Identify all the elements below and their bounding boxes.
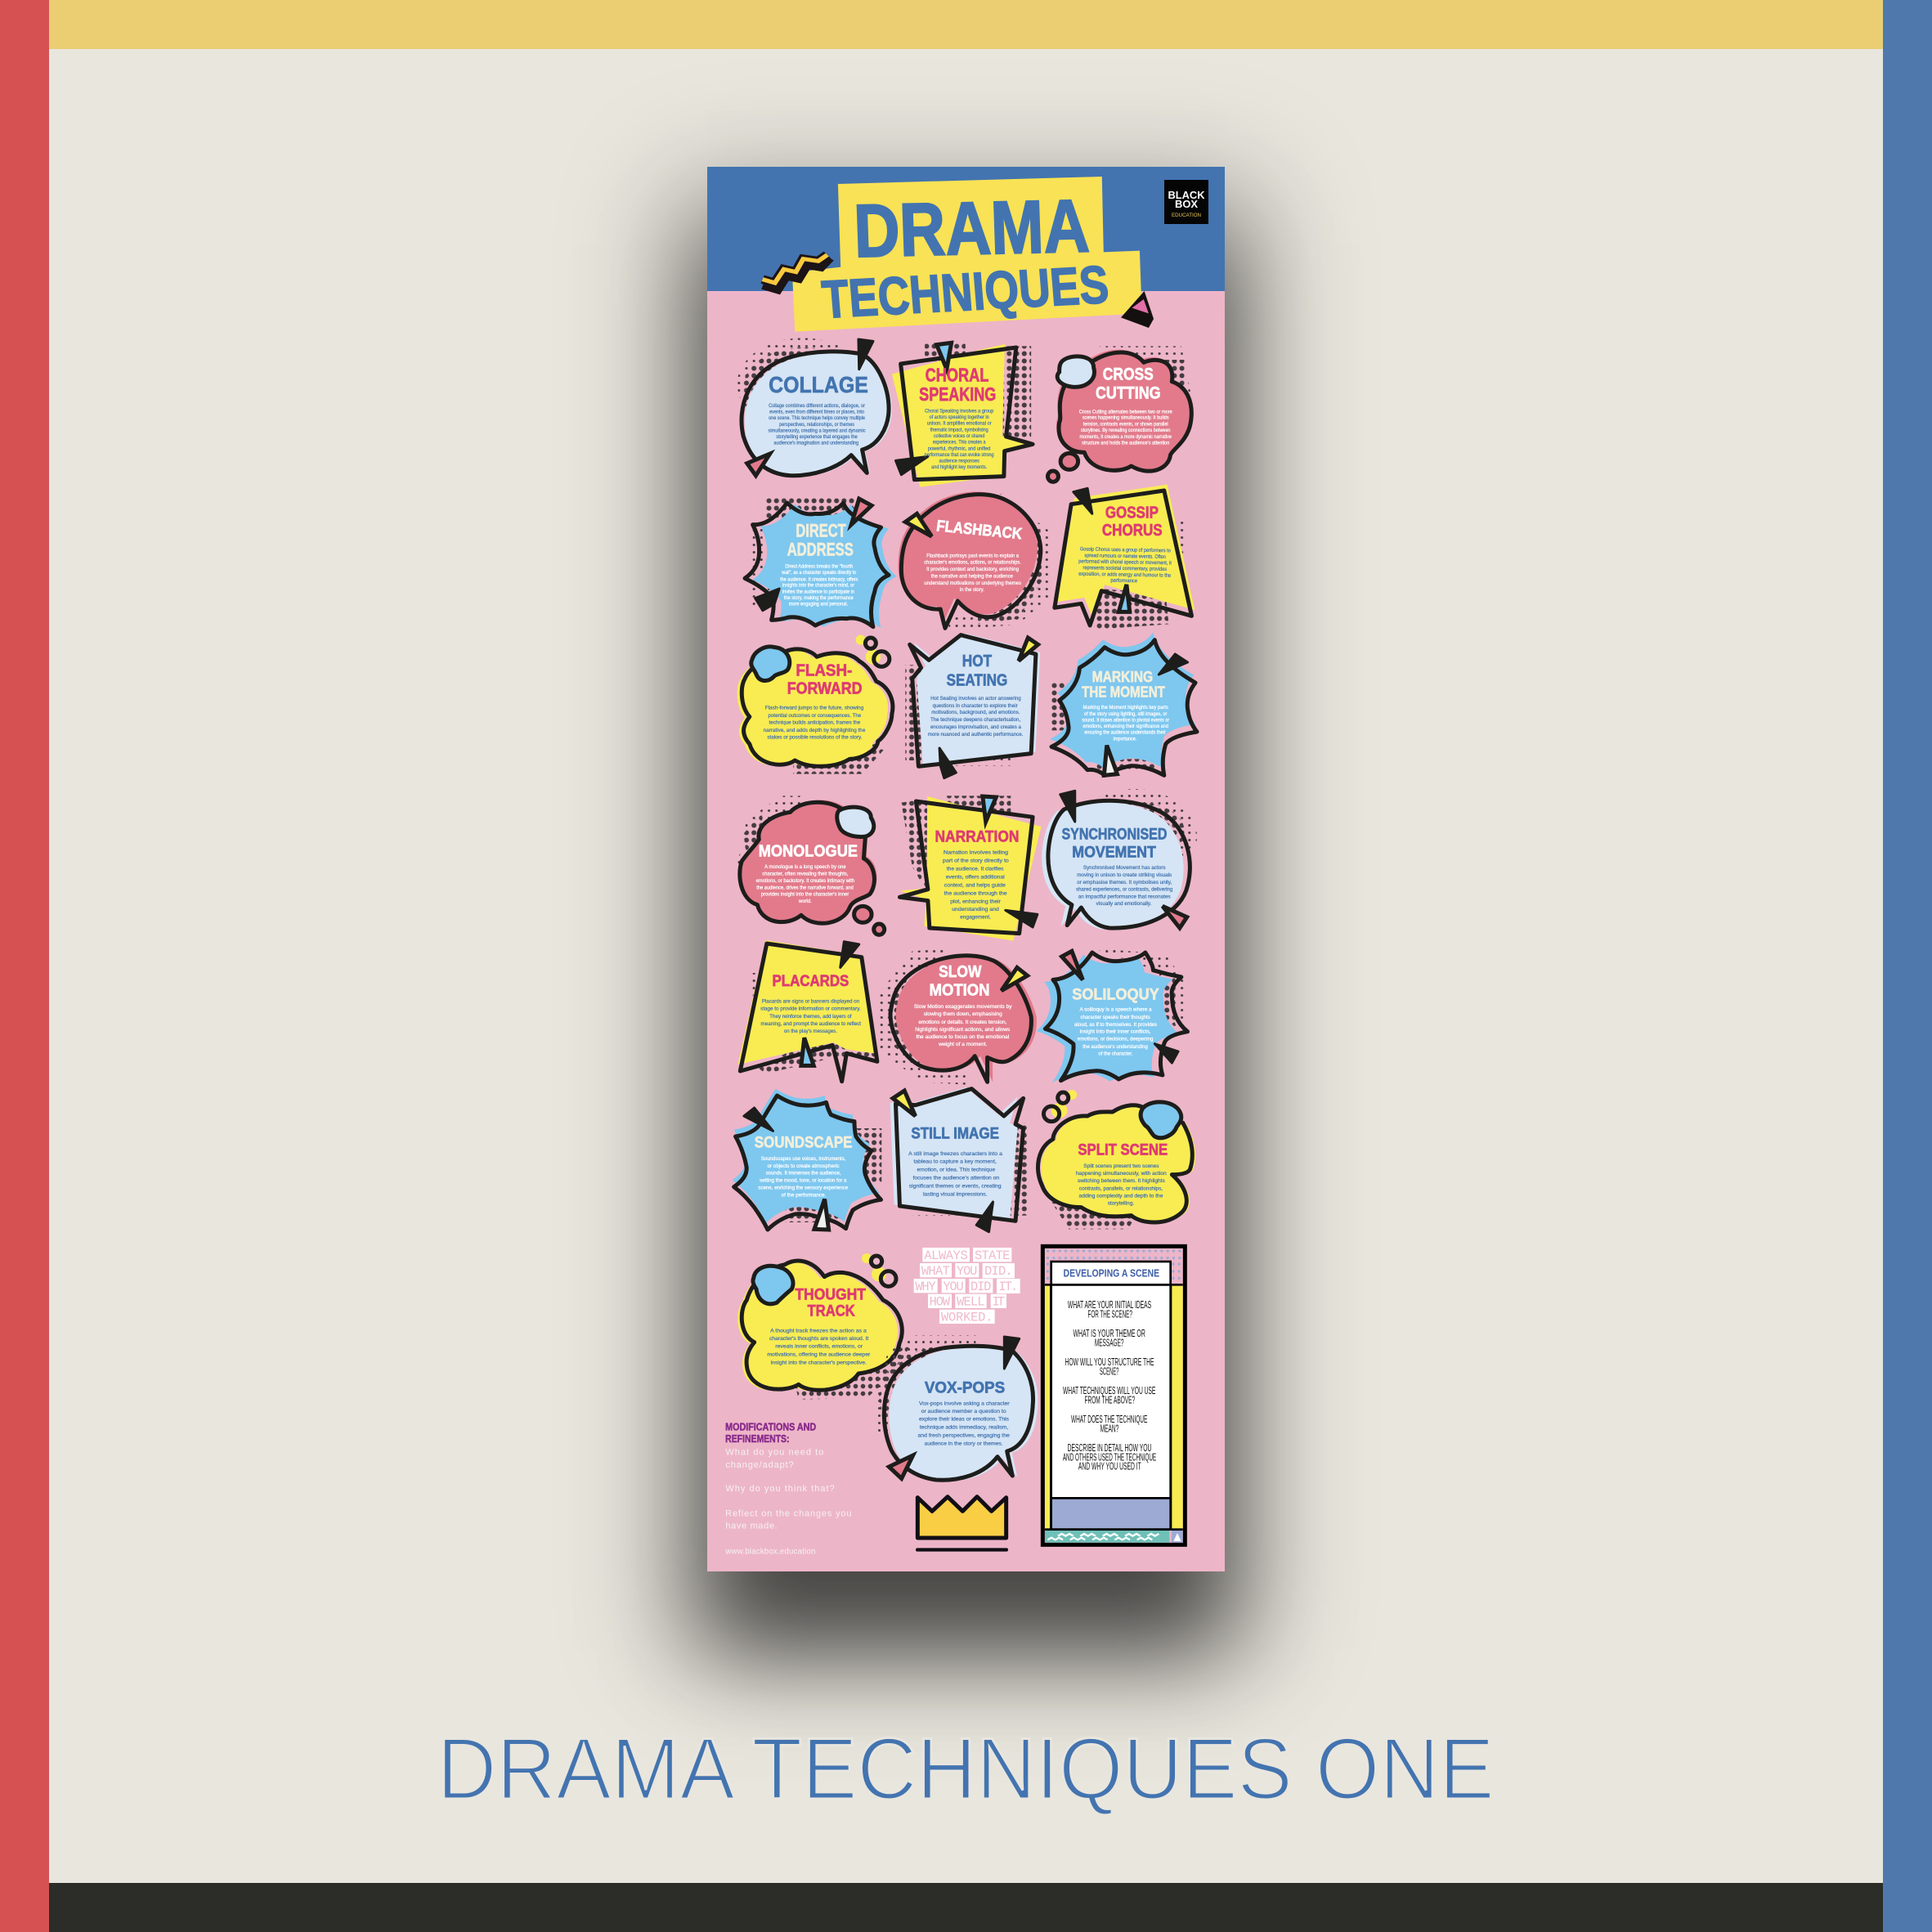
callout: always state: WHAT xyxy=(921,1264,950,1279)
placards text: on the play's messages. xyxy=(784,1029,837,1034)
soliloquy text: emotions, or decisions, deepening xyxy=(1078,1037,1154,1042)
thought track text: A thought track freezes the action as a xyxy=(770,1329,867,1334)
soundscape text: Soundscapes use voices, instruments, xyxy=(761,1156,846,1162)
title: TECHNIQUES: TECHNIQUES xyxy=(820,255,1111,329)
still image text: focuses the audience's attention on xyxy=(913,1176,999,1181)
choral speaking title: CHORAL xyxy=(926,365,988,386)
bubble: collage xyxy=(737,338,892,477)
slow motion text: slowing them down, emphasising xyxy=(924,1011,1002,1017)
text block: modifications and refinements: What do you need to xyxy=(725,1447,823,1457)
marking the moment text: importance. xyxy=(1114,737,1136,742)
soliloquy text xyxy=(1074,1007,1158,1057)
choral speaking text: audience responses xyxy=(939,459,979,464)
hot seating title xyxy=(947,651,1007,689)
flashback text xyxy=(924,554,1021,593)
choral speaking text xyxy=(925,409,994,470)
text block: modifications and refinements: Why do you think that? xyxy=(725,1484,835,1494)
choral speaking text: powerful, rhythmic, and unified xyxy=(928,446,991,451)
flashback text: the narrative and helping the audience xyxy=(931,574,1013,579)
header title block xyxy=(763,177,1154,332)
panel questions: WHAT IS YOUR THEME OR xyxy=(1073,1328,1145,1339)
cross cutting title: CROSS xyxy=(1103,364,1154,383)
still image text xyxy=(908,1151,1002,1198)
flash-forward text: technique builds anticipation, frames the xyxy=(769,720,860,726)
panel questions: FOR THE SCENE? xyxy=(1087,1309,1132,1320)
slow motion title: MOTION xyxy=(930,980,989,999)
panel: developing a scene xyxy=(1042,1246,1185,1544)
hot seating text xyxy=(928,696,1024,737)
slow motion text: highlights significant actions, and allows xyxy=(915,1027,1011,1033)
hot seating text: Hot Seating involves an actor answering xyxy=(930,696,1021,702)
icon: pink triangle xyxy=(1121,291,1154,328)
title yellow backing xyxy=(792,177,1142,332)
panel questions: FROM THE ABOVE? xyxy=(1084,1395,1135,1406)
cross cutting text: scenes happening simultaneously. It builds xyxy=(1083,415,1169,421)
slow motion text: weight of a moment. xyxy=(938,1042,988,1047)
direct address text: insights into the character's mind, or xyxy=(782,583,855,589)
callout: always state: IT. xyxy=(998,1280,1018,1294)
soliloquy text: A soliloquy is a speech where a xyxy=(1079,1007,1152,1013)
cross cutting text xyxy=(1079,410,1172,446)
panel title: DEVELOPING A SCENE xyxy=(1063,1268,1159,1280)
narration title: NARRATION xyxy=(935,828,1019,845)
collage text: events, even from different times or places, into xyxy=(769,410,864,415)
synchronised movement title xyxy=(1061,826,1167,861)
cross cutting title xyxy=(1096,364,1161,402)
callout: always state: STATE xyxy=(975,1248,1010,1263)
narration text: understanding and xyxy=(952,907,999,912)
soundscape text xyxy=(758,1156,848,1198)
split scene text xyxy=(1076,1163,1167,1207)
choral speaking text: experiences. This creates a xyxy=(933,440,986,446)
narration text: plot, enhancing their xyxy=(950,899,1002,904)
synchronised movement title: MOVEMENT xyxy=(1072,844,1156,861)
panel questions: WHAT TECHNIQUES WILL YOU USE xyxy=(1063,1385,1155,1396)
text block: modifications and refinements xyxy=(724,1421,851,1557)
logo: black box education: EDUCATION xyxy=(1172,213,1201,218)
bubble: cross cutting xyxy=(1047,346,1194,482)
thought track text: character's thoughts are spoken aloud. It xyxy=(769,1336,869,1342)
bubble: gossip chorus xyxy=(1055,485,1195,630)
marking the moment text xyxy=(1082,705,1170,742)
frame: left red band xyxy=(0,0,49,1932)
choral speaking text: thematic impact, symbolising xyxy=(930,428,988,433)
bubble: marking the moment xyxy=(1050,632,1197,775)
monologue text: A monologue is a long speech by one xyxy=(764,864,846,870)
slow motion title: SLOW xyxy=(939,962,982,981)
soliloquy text: aloud, as if to themselves. It provides xyxy=(1074,1022,1158,1028)
flash-forward title: FLASH- xyxy=(796,661,852,679)
still image text: lasting visual impressions. xyxy=(923,1192,988,1198)
callout: always state: YOU xyxy=(957,1264,977,1279)
text block: modifications and refinements: MODIFICATIONS AND xyxy=(725,1421,816,1432)
marking the moment title: MARKING xyxy=(1092,669,1153,686)
synchronised movement title: SYNCHRONISED xyxy=(1061,826,1167,843)
soliloquy text: insight into their inner conflicts, xyxy=(1080,1029,1151,1035)
narration text: context, and helps guide xyxy=(944,883,1006,889)
callout: always state: WELL xyxy=(957,1295,984,1310)
narration text: Narration involves telling xyxy=(944,850,1008,856)
monologue text xyxy=(756,864,854,904)
icon: zigzag xyxy=(763,255,829,289)
cross cutting text: tension, contrasts events, or shows parallel xyxy=(1083,422,1168,427)
bubble: soliloquy xyxy=(1037,948,1187,1083)
still image text: tableau to capture a key moment, xyxy=(913,1159,997,1165)
synchronised movement text: visually and emotionally. xyxy=(1096,901,1151,907)
synchronised movement text: Synchronised Movement has actors xyxy=(1083,865,1166,871)
marking the moment text: ensuring the audience understands their xyxy=(1084,730,1166,736)
choral speaking text: and highlight key moments. xyxy=(931,464,987,470)
bubble: split scene xyxy=(1038,1090,1195,1229)
poster blue header band xyxy=(707,167,1225,291)
panel questions: MESSAGE? xyxy=(1095,1338,1123,1349)
choral speaking text: performance that can evoke strong xyxy=(925,452,994,458)
gossip chorus text: spread rumours or narrate events. Often xyxy=(1084,553,1166,560)
split scene title: SPLIT SCENE xyxy=(1078,1141,1168,1159)
text block: modifications and refinements: Reflect on the changes you xyxy=(725,1508,851,1518)
bubble: placards xyxy=(738,940,878,1082)
direct address text: the audience. It creates intimacy, offers xyxy=(780,577,858,582)
bubble: monologue xyxy=(737,796,885,935)
soundscape text: or objects to create atmospheric xyxy=(768,1163,840,1169)
vox-pops text: technique adds immediacy, realism, xyxy=(920,1425,1008,1431)
gossip chorus text: Gossip Chorus uses a group of performers to xyxy=(1080,547,1171,554)
thought track text: reveals inner conflicts, emotions, or xyxy=(775,1344,863,1350)
callout: always state: DID xyxy=(970,1280,991,1294)
gossip chorus title: GOSSIP xyxy=(1105,504,1159,522)
flash-forward text: narrative, and adds depth by highlighting the xyxy=(764,728,866,733)
collage text: simultaneously, creating a layered and dynamic xyxy=(769,428,866,433)
panel questions: WHAT DOES THE TECHNIQUE xyxy=(1071,1414,1147,1425)
slow motion text: Slow Motion exaggerates movements by xyxy=(914,1004,1012,1010)
synchronised movement text: moving in unison to create striking visuals xyxy=(1077,872,1172,878)
hot seating text: more nuanced and authentic performance. xyxy=(928,732,1024,737)
collage text: Collage combines different actions, dialogue, or xyxy=(769,403,866,409)
direct address text: the story, making the performance xyxy=(784,595,854,601)
flash-forward text: stakes or possible resolutions of the story. xyxy=(767,735,862,741)
direct address title xyxy=(787,522,854,560)
text block: modifications and refinements: www.blackbox.education xyxy=(724,1548,815,1557)
flashback text: It provides context and backstory, enriching xyxy=(926,567,1019,572)
narration text: the audience through the xyxy=(944,891,1007,897)
choral speaking text: Choral Speaking involves a group xyxy=(925,409,993,414)
panel corner triangle xyxy=(1172,1531,1183,1543)
synchronised movement text xyxy=(1076,865,1173,907)
bubble: flash-forward xyxy=(737,635,893,774)
callout: always state: ALWAYS xyxy=(924,1248,968,1263)
soundscape text: of the performance. xyxy=(782,1193,826,1198)
monologue text: provides insight into the character's inner xyxy=(761,892,849,897)
cross cutting text: moments, it creates a more dynamic narrative xyxy=(1079,434,1172,440)
bubble: still image xyxy=(890,1087,1029,1232)
monologue text: world. xyxy=(798,899,812,904)
split scene text: storytelling. xyxy=(1108,1201,1134,1207)
soundscape text: scene, enriching the sensory experience xyxy=(758,1186,848,1190)
poster background with drop shadow xyxy=(707,167,1225,1571)
vox-pops text: Vox-pops involve asking a character xyxy=(919,1401,1010,1407)
choral speaking title: SPEAKING xyxy=(919,384,996,406)
gossip chorus text: represents societal commentary, provides xyxy=(1083,565,1168,572)
bubble: thought track xyxy=(737,1253,910,1400)
monologue text: character, often revealing their thoughts, xyxy=(762,872,849,876)
callout: always state: HOW xyxy=(930,1295,951,1310)
marking the moment title: THE MOMENT xyxy=(1082,684,1165,701)
collage text: storytelling experience that engages the xyxy=(776,434,858,440)
narration text xyxy=(943,850,1009,921)
cross cutting text: Cross Cutting alternates between two or more xyxy=(1079,410,1172,415)
narration text: part of the story directly to xyxy=(943,858,1009,864)
panel questions: AND WHY YOU USED IT xyxy=(1078,1461,1141,1473)
flashback text: understand motivations or underlying themes xyxy=(924,580,1021,586)
direct address text: more engaging and personal. xyxy=(789,602,848,607)
soliloquy text: of the character. xyxy=(1098,1051,1133,1057)
synchronised movement text: shared experiences, or contrasts, delivering xyxy=(1076,887,1173,893)
logo: black box education: BOX xyxy=(1175,198,1198,210)
still image text: A still image freezes characters into a xyxy=(908,1151,1002,1157)
placards text xyxy=(760,999,861,1034)
marking the moment title xyxy=(1082,669,1165,701)
collage text: one scene. This technique helps convey multiple xyxy=(769,415,865,421)
thought track text: motivations, offering the audience deeper xyxy=(767,1352,870,1358)
still image text: emotion, or idea. This technique xyxy=(917,1168,995,1173)
vox-pops text: explore their ideas or emotions. This xyxy=(919,1417,1009,1423)
split scene text: adding complexity and depth to the xyxy=(1079,1194,1163,1199)
hot seating text: motivations, background, and emotions. xyxy=(931,710,1020,715)
monologue title: MONOLOGUE xyxy=(759,841,858,860)
vox-pops text: audience in the story or themes. xyxy=(925,1441,1003,1447)
monologue text: emotions, or backstory. It creates intimacy with xyxy=(756,878,854,884)
hot seating title: HOT xyxy=(962,651,992,670)
direct address text: Direct Address breaks the "fourth xyxy=(785,564,853,569)
choral speaking title xyxy=(919,365,996,406)
thought track title: TRACK xyxy=(807,1302,855,1320)
hot seating title: SEATING xyxy=(947,670,1007,689)
flashback text: character's emotions, actions, or relationships. xyxy=(924,560,1021,566)
caption: drama techniques one: DRAMA TECHNIQUES ONE xyxy=(437,1719,1495,1818)
gossip chorus text: exposition, or adds energy and humour to the xyxy=(1078,572,1171,579)
flash-forward text: Flash-forward jumps to the future, showing xyxy=(765,706,863,711)
vox-pops text: or audience member a question to xyxy=(921,1409,1006,1414)
text block: modifications and refinements: change/adapt? xyxy=(725,1460,794,1470)
placards text: stage to provide information or commentary. xyxy=(760,1006,861,1012)
slow motion text xyxy=(914,1004,1012,1047)
panel questions: HOW WILL YOU STRUCTURE THE xyxy=(1065,1356,1154,1368)
icon: crown xyxy=(916,1497,1008,1552)
cross cutting title: CUTTING xyxy=(1096,383,1161,402)
vox-pops text xyxy=(917,1401,1010,1447)
bubble: hot seating xyxy=(905,634,1040,778)
choral speaking text: unison. It amplifies emotional or xyxy=(927,421,992,427)
text block: modifications and refinements: have made. xyxy=(725,1521,778,1531)
split scene text: happening simultaneously, with action xyxy=(1076,1171,1167,1177)
logo: black box education xyxy=(1164,180,1208,224)
hot seating text: questions in character to explore their xyxy=(933,703,1018,709)
vox-pops title: VOX-POPS xyxy=(925,1379,1005,1396)
still image text: significant themes or events, creating xyxy=(909,1184,1002,1190)
direct address text xyxy=(780,564,858,607)
callout: always state: WORKED. xyxy=(941,1311,993,1325)
hot seating text: encourages improvisation, and creates a xyxy=(930,724,1021,730)
split scene text: Split scenes present two scenes xyxy=(1083,1163,1159,1169)
bubble: slow motion xyxy=(878,948,1037,1085)
flash-forward text xyxy=(764,706,866,741)
callout: always state: WHY xyxy=(915,1280,936,1294)
bubble: vox-pops xyxy=(877,1335,1038,1481)
gossip chorus text xyxy=(1078,547,1172,585)
flashback title: FLASHBACK xyxy=(935,518,1023,543)
gossip chorus title: CHORUS xyxy=(1102,521,1163,540)
split scene text: contrasts, parallels, or relationships, xyxy=(1079,1186,1163,1192)
narration text: events, offers additional xyxy=(946,875,1005,881)
soundscape text: sounds. It immerses the audience, xyxy=(766,1171,841,1177)
placards title: PLACARDS xyxy=(773,972,849,990)
direct address title: ADDRESS xyxy=(787,540,854,560)
direct address title: DIRECT xyxy=(796,522,846,541)
panel questions: SCENE? xyxy=(1100,1366,1118,1378)
flashback text: in the story. xyxy=(960,587,984,593)
thought track title: THOUGHT xyxy=(795,1286,866,1303)
bubble: synchronised movement xyxy=(1042,789,1197,930)
narration text: engagement. xyxy=(960,915,991,921)
synchronised movement text: an impactful performance that resonates xyxy=(1078,894,1171,899)
panel questions: WHAT ARE YOUR INITIAL IDEAS xyxy=(1068,1299,1151,1311)
still image title: STILL IMAGE xyxy=(911,1125,999,1142)
soliloquy text: character speaks their thoughts xyxy=(1080,1015,1150,1020)
split scene text: switching between them. It highlights xyxy=(1078,1178,1165,1184)
marking the moment text: Marking the Moment highlights key parts xyxy=(1083,705,1168,710)
marking the moment text: emotions, enhancing their significance and xyxy=(1083,724,1168,729)
frame: top yellow band xyxy=(49,0,1883,49)
soliloquy title: SOLILOQUY xyxy=(1072,986,1159,1003)
gossip chorus text: performed with choral speech or movement, it xyxy=(1078,559,1172,566)
slow motion title xyxy=(930,962,989,999)
slow motion text: the audience to focus on the emotional xyxy=(917,1034,1010,1040)
logo: black box education: BLACK xyxy=(1168,189,1205,201)
callout: always state xyxy=(914,1248,1020,1325)
gossip chorus title xyxy=(1102,504,1163,540)
bubble: flashback xyxy=(899,491,1050,631)
soundscape text: setting the mood, tone, or location for a xyxy=(760,1178,847,1183)
flash-forward title xyxy=(787,661,863,697)
placards text: meaning, and prompt the audience to reflect xyxy=(761,1021,861,1027)
choral speaking text: of actors speaking together in xyxy=(930,415,989,420)
slow motion text: emotions or details. It creates tension, xyxy=(918,1020,1006,1025)
flash-forward title: FORWARD xyxy=(787,679,863,697)
flash-forward text: potential outcomes or consequences. The xyxy=(769,713,861,719)
flashback text: Flashback portrays past events to explain a xyxy=(926,554,1019,558)
vox-pops text: and fresh perspectives, engaging the xyxy=(917,1433,1010,1439)
cross cutting text: structure and holds the audience's attention xyxy=(1082,441,1169,446)
direct address text: wall", as a character speaks directly to xyxy=(781,570,856,576)
collage text: perspectives, relationships, or themes xyxy=(779,422,854,428)
synchronised movement text: or emphasise themes. It symbolises unity, xyxy=(1077,880,1172,885)
thought track text: insight into the character's perspective. xyxy=(771,1360,867,1366)
text block: modifications and refinements: REFINEMENTS: xyxy=(725,1433,789,1445)
thought track text xyxy=(767,1329,870,1366)
thought track title xyxy=(795,1286,866,1320)
monologue text: the audience, drives the narrative forward, and xyxy=(756,885,854,890)
choral speaking text: collective voices or shared xyxy=(934,433,985,439)
narration text: the audience. It clarifies xyxy=(947,867,1004,872)
collage text xyxy=(769,403,866,446)
bubble: direct address xyxy=(745,496,897,628)
callout: always state: IT xyxy=(993,1295,1005,1310)
soliloquy text: the audience's understanding xyxy=(1083,1044,1148,1050)
callout: always state: DID. xyxy=(984,1264,1013,1279)
marking the moment text: of the story using lighting, still images, or xyxy=(1084,711,1168,717)
placards text: Placards are signs or banners displayed on xyxy=(762,999,859,1004)
bubble: choral speaking xyxy=(892,342,1033,487)
bubble: narration xyxy=(899,796,1041,941)
panel questions: DESCRIBE IN DETAIL HOW YOU xyxy=(1068,1442,1151,1454)
collage title: COLLAGE xyxy=(769,373,868,398)
panel questions xyxy=(1063,1299,1156,1473)
title: DRAMA: DRAMA xyxy=(853,184,1091,273)
cross cutting text: storylines. By revealing connections between xyxy=(1081,428,1171,433)
panel questions: AND OTHERS USED THE TECHNIQUE xyxy=(1063,1452,1156,1464)
collage text: audience's imagination and understanding xyxy=(773,441,858,446)
hot seating text: The technique deepens characterisation, xyxy=(930,717,1020,723)
callout: always state: YOU xyxy=(943,1280,964,1294)
frame: bottom dark band xyxy=(49,1883,1883,1932)
soundscape title: SOUNDSCAPE xyxy=(755,1134,853,1151)
direct address text: invites the audience to participate in xyxy=(782,589,854,594)
frame: right blue band xyxy=(1883,0,1932,1932)
placards text: They reinforce themes, add layers of xyxy=(769,1014,852,1020)
bubble: soundscape xyxy=(733,1089,881,1230)
panel questions: MEAN? xyxy=(1100,1423,1118,1435)
marking the moment text: sound. It draws attention to pivotal events or xyxy=(1082,718,1170,723)
gossip chorus text: performance xyxy=(1110,578,1137,584)
panel teal wave strip xyxy=(1045,1531,1169,1543)
